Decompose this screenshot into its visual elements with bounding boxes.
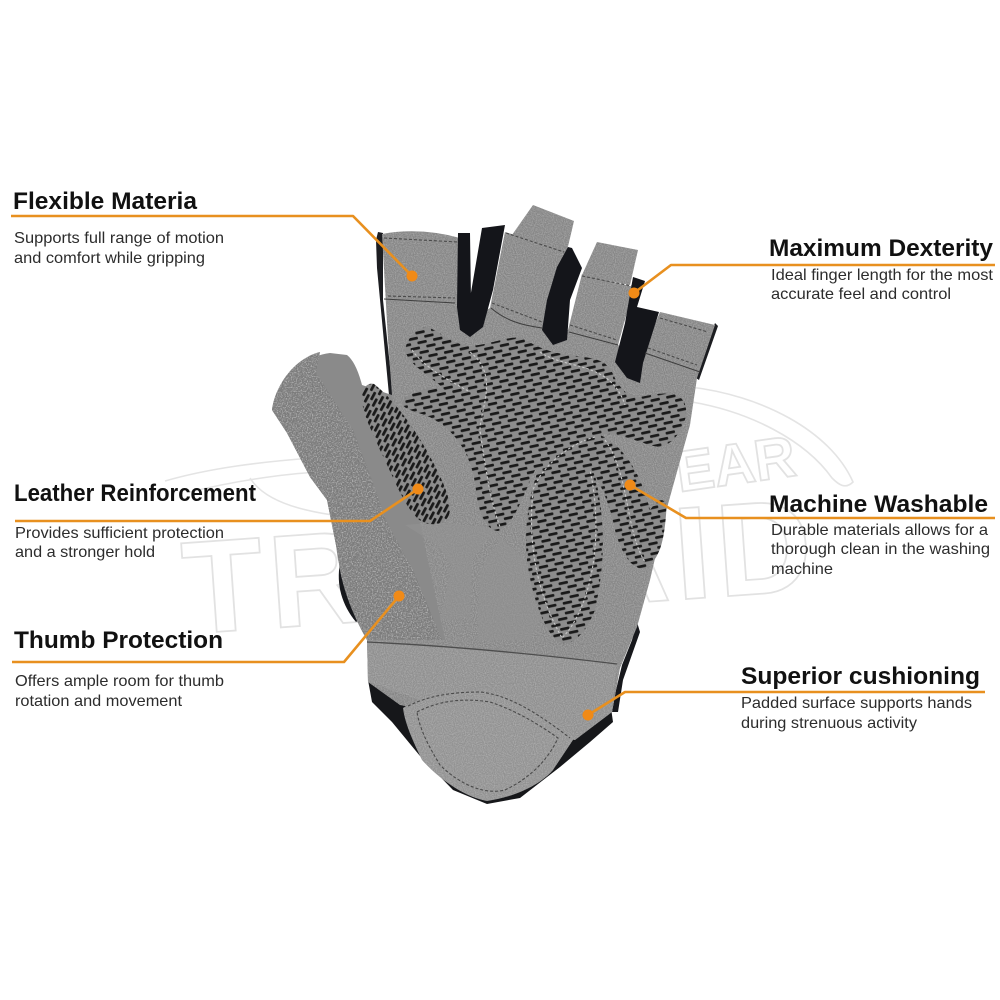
thumb base [272,353,445,640]
watermark logo [165,387,853,662]
gusset left [457,225,505,337]
callout: Superior cushioning [582,663,985,732]
glove [272,205,718,804]
callout: Superior cushioning: Superior cushioning [741,663,980,690]
thumb leather [272,352,442,640]
thumb-side black edge [339,563,362,622]
lower wrist strip [367,640,617,740]
finger seams [384,233,708,372]
bottom black binding [368,680,613,804]
callout: Maximum Dexterity: Ideal finger length for the most [771,267,994,284]
callout: Flexible Materia [11,188,418,282]
grip stitching [412,350,645,638]
grip patch: thumb mount [362,384,450,524]
callout: Thumb Protection: rotation and movement [15,693,183,710]
wrist flap [403,690,575,801]
flap stitching [408,692,570,791]
callout: Maximum Dexterity: accurate feel and control [771,286,951,303]
callout: Thumb Protection: Offers ample room for thumb [15,673,224,690]
callout: Machine Washable: thorough clean in the washing [771,541,990,558]
watermark logo: TRYMAID [178,471,816,662]
callout: Superior cushioning: Padded surface supports hands [741,695,972,712]
callout: Superior cushioning: during strenuous activity [741,715,917,732]
wrist seam [367,642,617,664]
palm Y seam panel [405,522,545,640]
callout: Leather Reinforcement: and a stronger hold [15,544,155,561]
callout: Flexible Materia: Supports full range of motion [14,230,224,247]
callout: Maximum Dexterity: Maximum Dexterity [769,235,993,262]
callout: Maximum Dexterity [628,235,995,303]
callout: Leather Reinforcement: Leather Reinforcement [14,480,256,507]
callout: Thumb Protection: Thumb Protection [14,627,223,654]
gusset right [615,277,659,383]
callout: Machine Washable: machine [771,561,833,578]
callout: Leather Reinforcement [14,480,424,561]
callout: Thumb Protection [12,590,404,710]
finger tabs [512,205,638,285]
watermark logo: EAR [672,424,800,505]
palm body [330,231,715,740]
callout: Machine Washable: Durable materials allows for a [771,522,988,539]
callout: Leather Reinforcement: Provides sufficient protection [15,525,224,542]
callout: Machine Washable: Machine Washable [769,491,988,518]
gusset middle [542,247,582,345]
right edge of index finger [696,323,718,380]
callout: Machine Washable [624,480,995,578]
callout: Flexible Materia: and comfort while gripping [14,250,205,267]
wrist-side black edge [612,622,640,712]
callout: Flexible Materia: Flexible Materia [13,188,197,215]
left edge of first finger [376,232,393,395]
grip patch: main palm [402,327,686,643]
